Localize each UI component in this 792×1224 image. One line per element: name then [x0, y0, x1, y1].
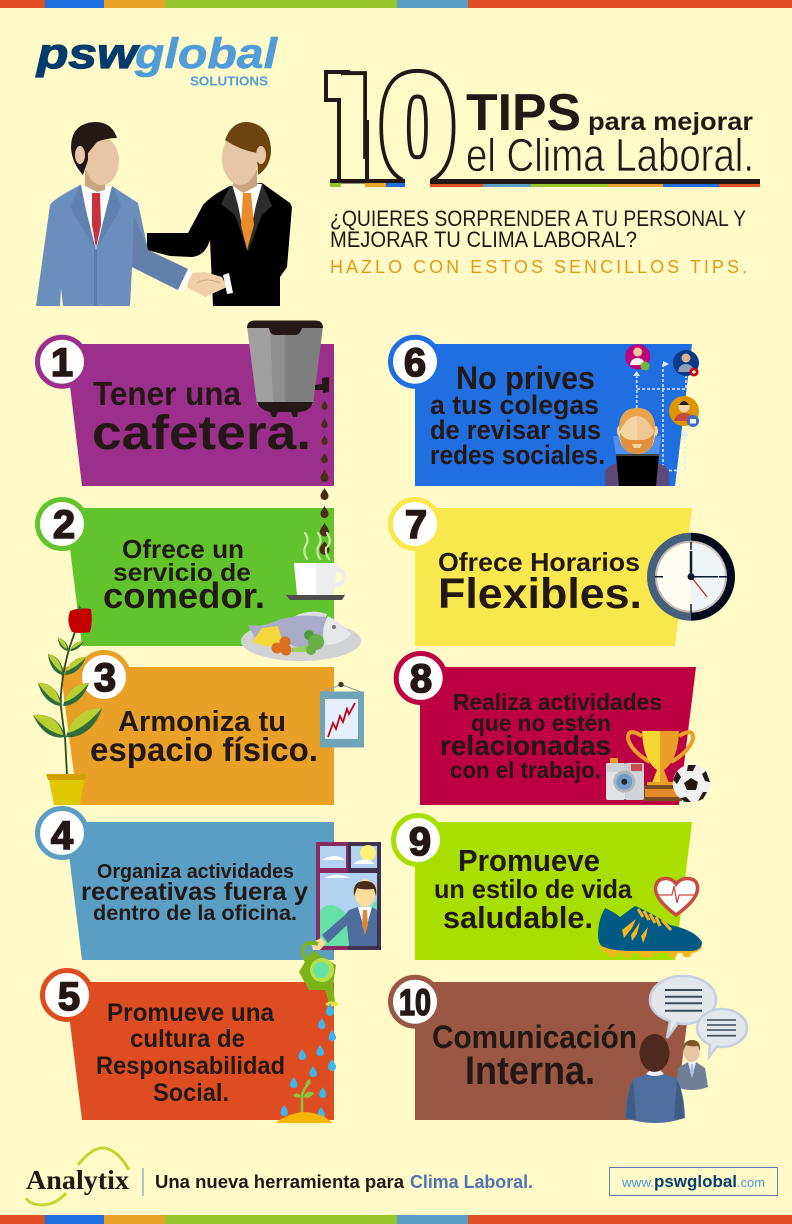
icon: water drops and sprout: [275, 1003, 336, 1123]
text 7: Ofrece Horarios: [438, 547, 640, 577]
small man: [676, 1040, 708, 1090]
text 4: dentro de la oficina.: [93, 902, 297, 925]
panel 1: cafetera: [38, 337, 334, 486]
text 10: [432, 1019, 637, 1093]
panel 10: comunicacion interna: [390, 977, 692, 1120]
soccer ball: [673, 764, 711, 802]
panel 8: actividades no relacionadas: [396, 654, 696, 805]
text 10: Interna.: [465, 1049, 595, 1093]
badge 9: [394, 816, 442, 864]
numeral 10: 0: [381, 47, 454, 208]
text 3: [90, 706, 318, 768]
panel 3: espacio fisico: [60, 652, 334, 805]
icon: heart with pulse: [656, 878, 698, 915]
text 1: Tener una: [93, 375, 242, 412]
panel 7: horarios flexibles: [390, 500, 692, 646]
text 4: Organiza actividades: [97, 861, 294, 883]
badge 3: 3: [94, 656, 116, 700]
panel 2: comedor: [38, 500, 334, 646]
text 5: Promueve una: [107, 999, 275, 1027]
illustration: two men shaking hands: [36, 122, 292, 306]
logo: pswglobal solutions: SOLUTIONS: [190, 74, 268, 89]
footer website box: .com: [737, 1175, 765, 1190]
text 1: [92, 375, 311, 460]
badge 3: [80, 652, 128, 702]
title: 10 tips: para mejorar: [588, 108, 753, 136]
heading words: TIPS: [466, 84, 581, 142]
panel 4: actividades: [38, 808, 334, 960]
icon: soccer shoe: [598, 906, 702, 957]
badge 7: [390, 500, 440, 548]
text 8: relacionadas: [440, 730, 611, 761]
icon: coffee machine with drops: [247, 320, 330, 555]
footer: Analytix logo: [26, 1148, 130, 1205]
text 8: Realiza actividades: [453, 689, 662, 715]
text 5: [96, 999, 285, 1107]
badge 7: 7: [405, 503, 427, 547]
intro text: ¿QUIERES SORPRENDER A TU PERSONAL Y: [330, 206, 746, 231]
footer tagline: [155, 1172, 533, 1192]
badge 6: [390, 337, 440, 386]
text 6: de revisar sus: [430, 415, 601, 445]
badge 6: 6: [404, 341, 426, 385]
text 5: cultura de: [130, 1025, 245, 1053]
text 2: [103, 534, 265, 616]
numeral 10: 1: [310, 47, 386, 207]
handshake: [178, 269, 233, 297]
logo: pswglobal solutions: psw: [36, 30, 140, 78]
icon: window with man and watering can: [299, 842, 381, 1006]
title: 10 tips: [296, 47, 760, 208]
text 5: Responsabilidad: [96, 1052, 285, 1080]
intro text: MEJORAR TU CLIMA LABORAL?: [330, 227, 637, 252]
intro text: [330, 206, 747, 277]
icon: framed chart: [320, 682, 364, 748]
text 4: [81, 861, 308, 925]
text 9: un estilo de vida: [434, 874, 633, 904]
text 8: que no estén: [471, 710, 611, 736]
footer website box: www.: [621, 1175, 654, 1190]
avatar: woman: [625, 344, 650, 370]
text 5: Social.: [153, 1079, 229, 1107]
badge 10: [390, 977, 440, 1026]
logo: pswglobal solutions: [36, 30, 278, 89]
intro text: HAZLO CON ESTOS SENCILLOS TIPS.: [330, 257, 747, 277]
right man in black suit: [147, 122, 292, 306]
icon: clock: [647, 533, 735, 621]
text 8: [440, 689, 662, 783]
window with man: [311, 842, 381, 950]
badge 8: 8: [410, 657, 432, 701]
text 4: recreativas fuera y: [81, 878, 308, 906]
footer tagline: Una nueva herramienta para: [155, 1172, 405, 1192]
badge 8: [396, 654, 445, 702]
title rule: [330, 179, 760, 187]
text 6: No prives: [456, 360, 595, 396]
text 2: comedor.: [103, 575, 265, 616]
badge 5: 5: [58, 975, 80, 1019]
numeral 10: 0: [381, 47, 454, 208]
icon: plant in pot with apple: [33, 605, 102, 805]
badge 2: 2: [53, 503, 75, 547]
top colour bar: [0, 0, 792, 8]
icon: person with social network: [605, 344, 699, 486]
icon: coffee cup with steam: [286, 533, 345, 600]
badge 9: 9: [409, 820, 431, 864]
badge 5: [42, 970, 92, 1020]
icon: two people with speech bubbles: [625, 976, 747, 1123]
text 3: Armoniza tu: [118, 706, 286, 738]
numeral 10: 1: [310, 47, 386, 207]
text 7: Flexibles.: [438, 570, 642, 618]
badge 1: [38, 337, 86, 386]
bottom colour bar: [0, 1215, 792, 1224]
badge 2: [38, 500, 86, 548]
camera: [606, 758, 644, 800]
badge 10: 10: [399, 982, 431, 1023]
badge 4: 4: [51, 814, 74, 858]
text 10: Comunicación: [432, 1019, 637, 1055]
text 8: con el trabajo.: [450, 757, 601, 783]
text 2: servicio de: [113, 559, 251, 587]
text 3: espacio físico.: [90, 731, 318, 768]
person at laptop: [605, 408, 669, 486]
logo: pswglobal solutions: global: [134, 30, 278, 78]
icon: plate with fish: [241, 612, 361, 661]
text 9: [434, 843, 633, 935]
avatar: man with red badge: [673, 350, 699, 376]
text 9: Promueve: [458, 843, 600, 878]
footer: Analytix logo: Analytix: [26, 1165, 130, 1195]
icon: trophy, camera and ball: [606, 731, 711, 802]
text 6: [430, 360, 605, 470]
trophy: [628, 731, 693, 801]
left man in blue suit: [36, 122, 188, 306]
big man from behind: [625, 1034, 685, 1123]
text 6: a tus colegas: [430, 390, 599, 420]
badge 1: 1: [51, 341, 73, 385]
panel 6: redes sociales: [390, 337, 692, 486]
panel 9: vida saludable: [394, 816, 692, 960]
avatar: man with like badge: [669, 396, 699, 427]
text 7: [438, 547, 642, 618]
badge 4: [38, 808, 86, 858]
watering can: [299, 943, 338, 1006]
footer website box: [610, 1168, 778, 1196]
footer tagline: Clima Laboral.: [410, 1172, 533, 1192]
footer divider: [142, 1168, 144, 1196]
numeral 10: [296, 47, 454, 208]
small speech bubble: [697, 1009, 747, 1057]
text 6: redes sociales.: [430, 440, 605, 470]
text 2: Ofrece un: [122, 534, 244, 564]
footer website box: pswglobal: [654, 1172, 737, 1191]
panel 5: responsabilidad social: [42, 970, 334, 1120]
big speech bubble: [650, 976, 716, 1038]
dashed network lines: [637, 364, 686, 470]
text 1: cafetera.: [92, 407, 311, 460]
text 9: saludable.: [443, 900, 593, 935]
